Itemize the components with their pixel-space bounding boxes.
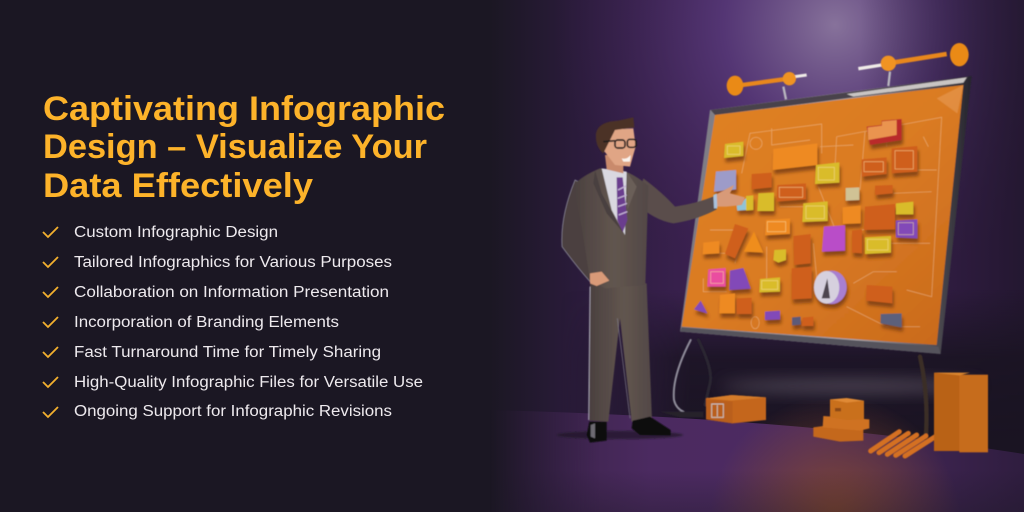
yellow blocks — [724, 142, 913, 292]
triangle block — [744, 232, 763, 253]
title: Data Effectively — [43, 167, 313, 205]
purple blocks — [694, 219, 917, 320]
red notched block — [867, 119, 902, 145]
item: custom design: Custom Infographic Design — [74, 224, 278, 241]
title — [43, 90, 445, 205]
lavender and grey blocks — [714, 170, 902, 327]
block outlines — [711, 146, 913, 289]
shoes — [587, 417, 671, 443]
title: Design – Visualize Your — [43, 128, 427, 166]
title: Captivating Infographic — [43, 90, 445, 128]
item: branding: Incorporation of Branding Elements — [74, 314, 339, 331]
curtain rod left — [727, 72, 807, 99]
item: collaboration: Collaboration on Information Presentation — [74, 284, 389, 301]
item: ongoing support: Ongoing Support for Infographic Revisions — [74, 403, 392, 420]
back wall shadow band — [610, 304, 1024, 454]
illustration: stand and boxes — [660, 340, 988, 456]
far arm — [637, 178, 717, 223]
item: high quality files: High-Quality Infographic Files for Versatile Use — [74, 374, 423, 391]
jacket — [573, 168, 648, 288]
lapels — [593, 170, 623, 233]
tall boxes — [934, 373, 988, 452]
near arm — [562, 180, 602, 282]
board stand legs — [660, 340, 927, 435]
floor shadow under presenter — [557, 431, 683, 439]
orange blocks — [703, 143, 861, 313]
stacked boxes — [813, 398, 869, 442]
illustration: whiteboard — [680, 43, 972, 354]
floor — [526, 406, 1024, 512]
illustration: presenter — [557, 117, 745, 443]
trousers — [589, 283, 652, 422]
box left — [706, 395, 766, 423]
shirt cuff — [713, 193, 717, 208]
gauge dial — [814, 271, 847, 304]
item: fast turnaround: Fast Turnaround Time for Timely Sharing — [74, 344, 381, 361]
circuit lines — [703, 117, 942, 329]
hands — [590, 185, 745, 286]
necktie — [617, 177, 627, 233]
block cluster — [694, 119, 917, 327]
board surface — [682, 85, 963, 345]
curtain rod right — [858, 43, 969, 86]
head — [596, 117, 636, 173]
magenta and pink blocks — [707, 225, 845, 287]
sticks — [871, 432, 935, 456]
glasses — [603, 139, 636, 148]
item: tailored infographics: Tailored Infographics for Various Purposes — [74, 254, 392, 271]
checklist — [43, 224, 423, 420]
board frame — [680, 76, 972, 354]
dark orange blocks — [725, 146, 917, 326]
shirt — [602, 168, 627, 235]
